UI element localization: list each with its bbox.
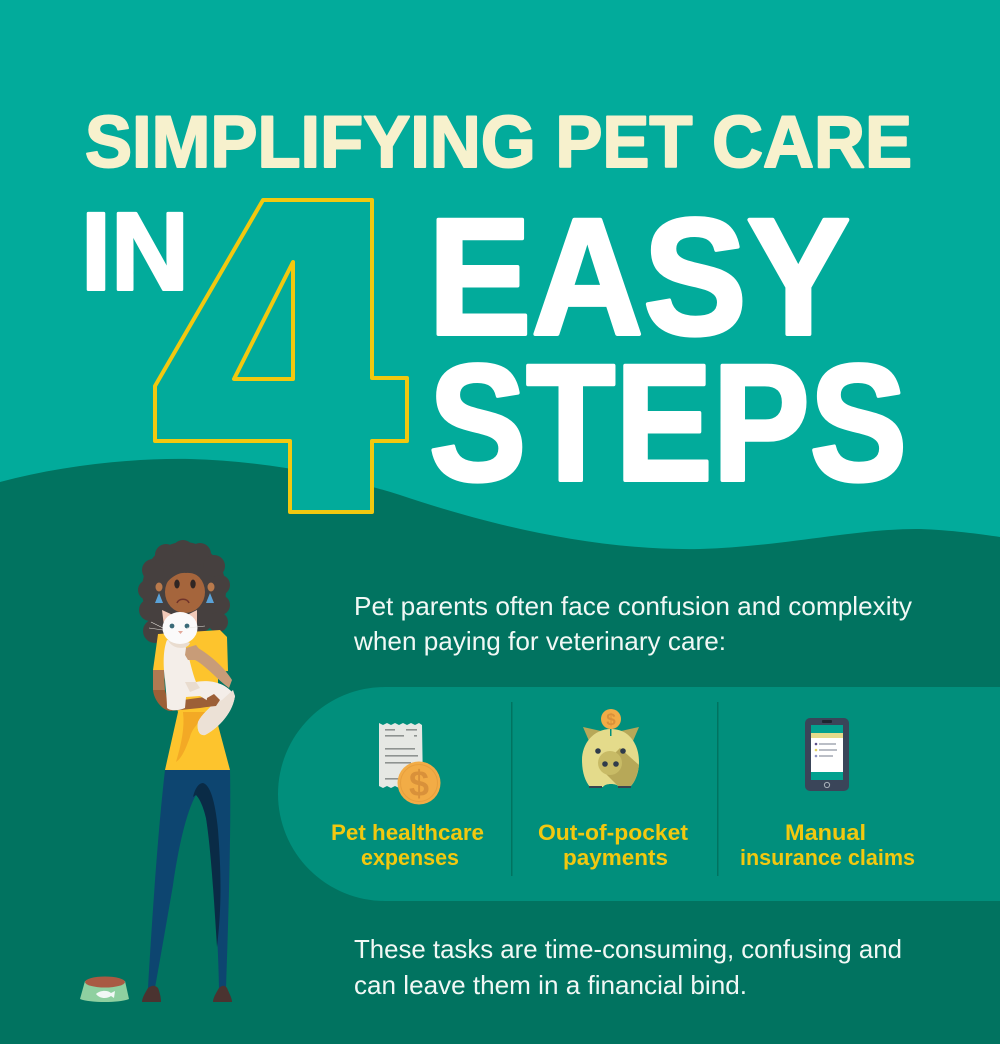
- closing text: [354, 934, 902, 1000]
- label: out-of-pocket payments: [538, 820, 689, 870]
- face: [165, 568, 205, 613]
- cat: [149, 610, 235, 735]
- intro text: [353, 591, 912, 656]
- title word: easy: EASY: [428, 185, 850, 370]
- title word: steps: STEPS: [429, 331, 907, 516]
- label: manual insurance claims: Manual: [785, 820, 866, 845]
- label: out-of-pocket payments: Out-of-pocket: [538, 820, 689, 845]
- shoes: [142, 986, 161, 1002]
- closing text: These tasks are time-consuming, confusing and: [354, 934, 902, 964]
- label: pet healthcare expenses: Pet healthcare: [331, 820, 484, 845]
- label: pet healthcare expenses: [331, 820, 484, 870]
- intro text: when paying for veterinary care:: [353, 626, 726, 656]
- icon: piggy bank with coin: [582, 709, 639, 788]
- closing text: can leave them in a financial bind.: [354, 970, 747, 1000]
- title word: in: IN: [81, 190, 189, 314]
- icon: receipt with dollar coin: $: [409, 763, 429, 804]
- icon: piggy bank with coin: $: [606, 710, 616, 729]
- icon: smartphone: [805, 718, 849, 791]
- ears and earrings: [155, 582, 214, 603]
- title line: simplifying pet care: SIMPLIFYING PET CARE: [85, 102, 912, 183]
- title numeral: outlined 4: [155, 200, 407, 512]
- panel: pain points: [278, 687, 1000, 901]
- pants: [148, 770, 230, 988]
- label: manual insurance claims: [740, 820, 915, 870]
- right arm and hands: [185, 645, 232, 707]
- label: manual insurance claims: insurance claims: [740, 845, 915, 870]
- label: pet healthcare expenses: expenses: [361, 845, 459, 870]
- illustration: woman holding cat: [138, 540, 235, 1002]
- title: [81, 102, 912, 516]
- label: out-of-pocket payments: payments: [563, 845, 668, 870]
- left arm: [153, 670, 220, 711]
- shirt: [153, 630, 230, 770]
- intro text: Pet parents often face confusion and complexity: [354, 591, 912, 621]
- icon: receipt with dollar coin: [379, 723, 440, 804]
- background: dark green wave: [0, 459, 1000, 1044]
- icon: pet food bowl: [80, 976, 129, 1002]
- hair: [138, 540, 230, 643]
